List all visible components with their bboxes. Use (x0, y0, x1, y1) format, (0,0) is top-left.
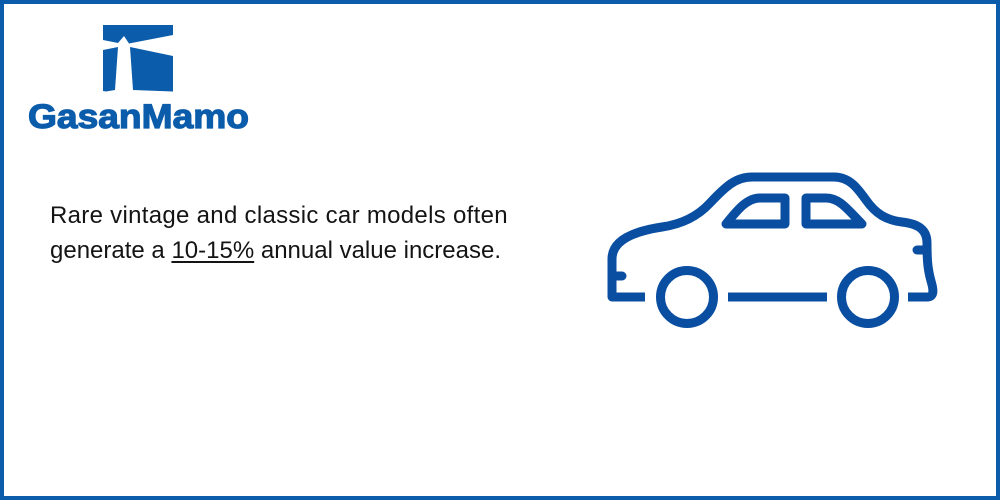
body text: generate a 10-15% annual value increase. (50, 237, 501, 264)
undercarriage line (728, 292, 827, 302)
rear wheel (842, 270, 894, 324)
front window (806, 198, 862, 224)
body text: Rare vintage and classic car models often (50, 202, 508, 229)
body text (50, 202, 508, 264)
logo: GasanMamo (28, 25, 249, 136)
logo icon: lighthouse (103, 25, 173, 92)
car front light notch (917, 246, 927, 254)
car rear bumper notch (612, 272, 622, 280)
rear window (726, 198, 785, 224)
car body outline (612, 177, 933, 297)
logo wordmark: GasanMamo (28, 98, 249, 136)
front wheel (660, 270, 714, 324)
